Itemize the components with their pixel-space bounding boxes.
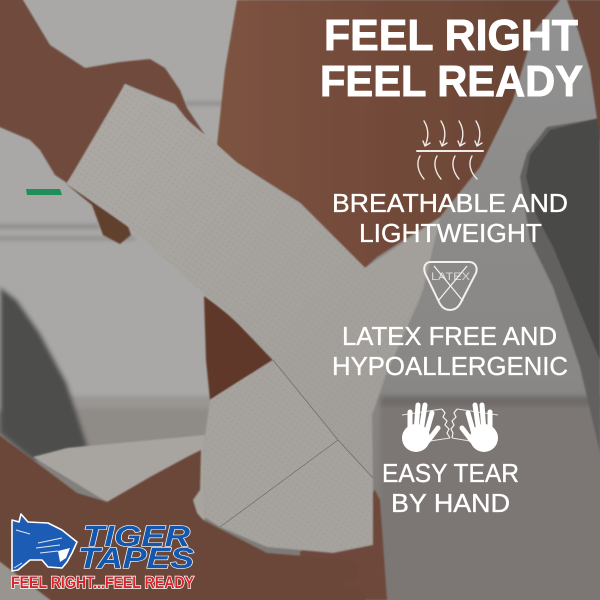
lower leg skin bbox=[300, 490, 387, 600]
sheet corner bottom left bbox=[0, 558, 57, 600]
icon: latex free: LATEX bbox=[431, 271, 471, 283]
text: easy tear by hand: EASY TEAR bbox=[382, 458, 519, 488]
logo: Tiger Tapes bbox=[11, 514, 195, 592]
top hand lower finger bbox=[65, 183, 131, 244]
text: breathable and lightweight: LIGHTWEIGHT bbox=[359, 218, 542, 248]
logo wordmark bbox=[78, 521, 195, 575]
icon: hands tearing tape bbox=[402, 405, 498, 452]
headline bbox=[320, 11, 583, 106]
icon: latex free bbox=[424, 262, 477, 310]
tape lower wrap bbox=[203, 360, 373, 553]
logo tagline: FEEL RIGHT...FEEL READY bbox=[11, 573, 195, 592]
top hand and arm bbox=[0, 0, 205, 183]
green mark on wall bbox=[26, 189, 62, 195]
text: latex free and hypoallergenic: HYPOALLERGENIC bbox=[332, 351, 568, 381]
text: latex free and hypoallergenic: LATEX FREE AND bbox=[342, 321, 557, 351]
tape bandage bbox=[67, 84, 440, 553]
logo wordmark: TAPES bbox=[78, 543, 195, 575]
tape upper band bbox=[67, 84, 440, 478]
text: latex free and hypoallergenic bbox=[332, 321, 568, 381]
logo wordmark: TIGER bbox=[83, 521, 190, 553]
white sheet bbox=[33, 435, 205, 520]
knee skin triangle bbox=[204, 296, 273, 400]
icon: breathable air arrows bbox=[417, 121, 483, 179]
brown shape top right bbox=[567, 0, 600, 150]
tape texture bbox=[67, 84, 423, 553]
lower hand and wrist bbox=[0, 432, 367, 600]
tape seam lines bbox=[220, 360, 373, 527]
leg upper skin bbox=[217, 0, 560, 268]
text: easy tear by hand bbox=[382, 458, 519, 518]
logo tiger head bbox=[12, 514, 77, 571]
chair back right bbox=[520, 118, 600, 453]
text: breathable and lightweight bbox=[332, 188, 568, 248]
text: breathable and lightweight: BREATHABLE AND bbox=[332, 188, 568, 218]
headline line 1: FEEL RIGHT bbox=[324, 11, 578, 60]
headline line 2: FEEL READY bbox=[320, 57, 583, 106]
text: easy tear by hand: BY HAND bbox=[391, 488, 510, 518]
